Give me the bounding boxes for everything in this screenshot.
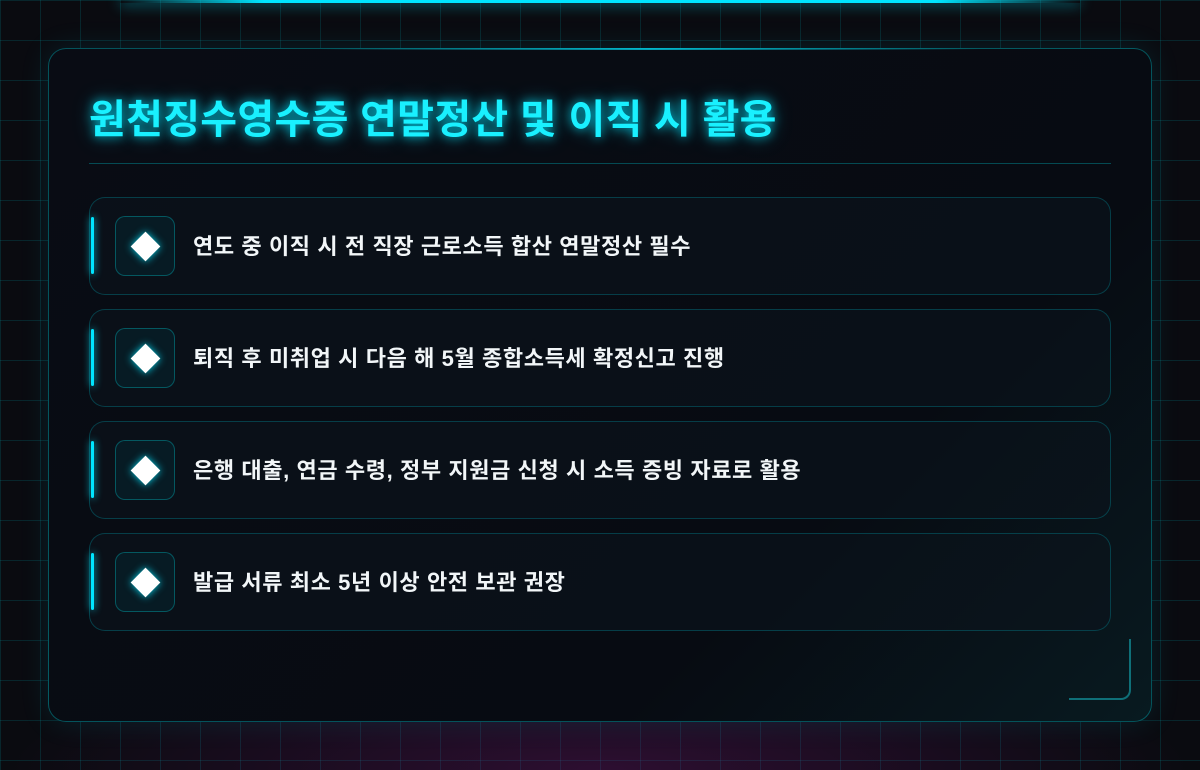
title: 원천징수영수증 연말정산 및 이직 시 활용 bbox=[89, 98, 777, 142]
item 3 bbox=[89, 421, 1111, 519]
item 3: 은행 대출, 연금 수령, 정부 지원금 신청 시 소득 증빙 자료로 활용 bbox=[193, 458, 801, 483]
item 1: 연도 중 이직 시 전 직장 근로소득 합산 연말정산 필수 bbox=[193, 234, 691, 259]
item 2: 퇴직 후 미취업 시 다음 해 5월 종합소득세 확정신고 진행 bbox=[193, 346, 725, 371]
corner bracket bbox=[1069, 639, 1131, 700]
item 4: 발급 서류 최소 5년 이상 안전 보관 권장 bbox=[193, 570, 565, 595]
item 2 bbox=[89, 309, 1111, 407]
item 1 bbox=[89, 197, 1111, 295]
item 4 bbox=[89, 533, 1111, 631]
